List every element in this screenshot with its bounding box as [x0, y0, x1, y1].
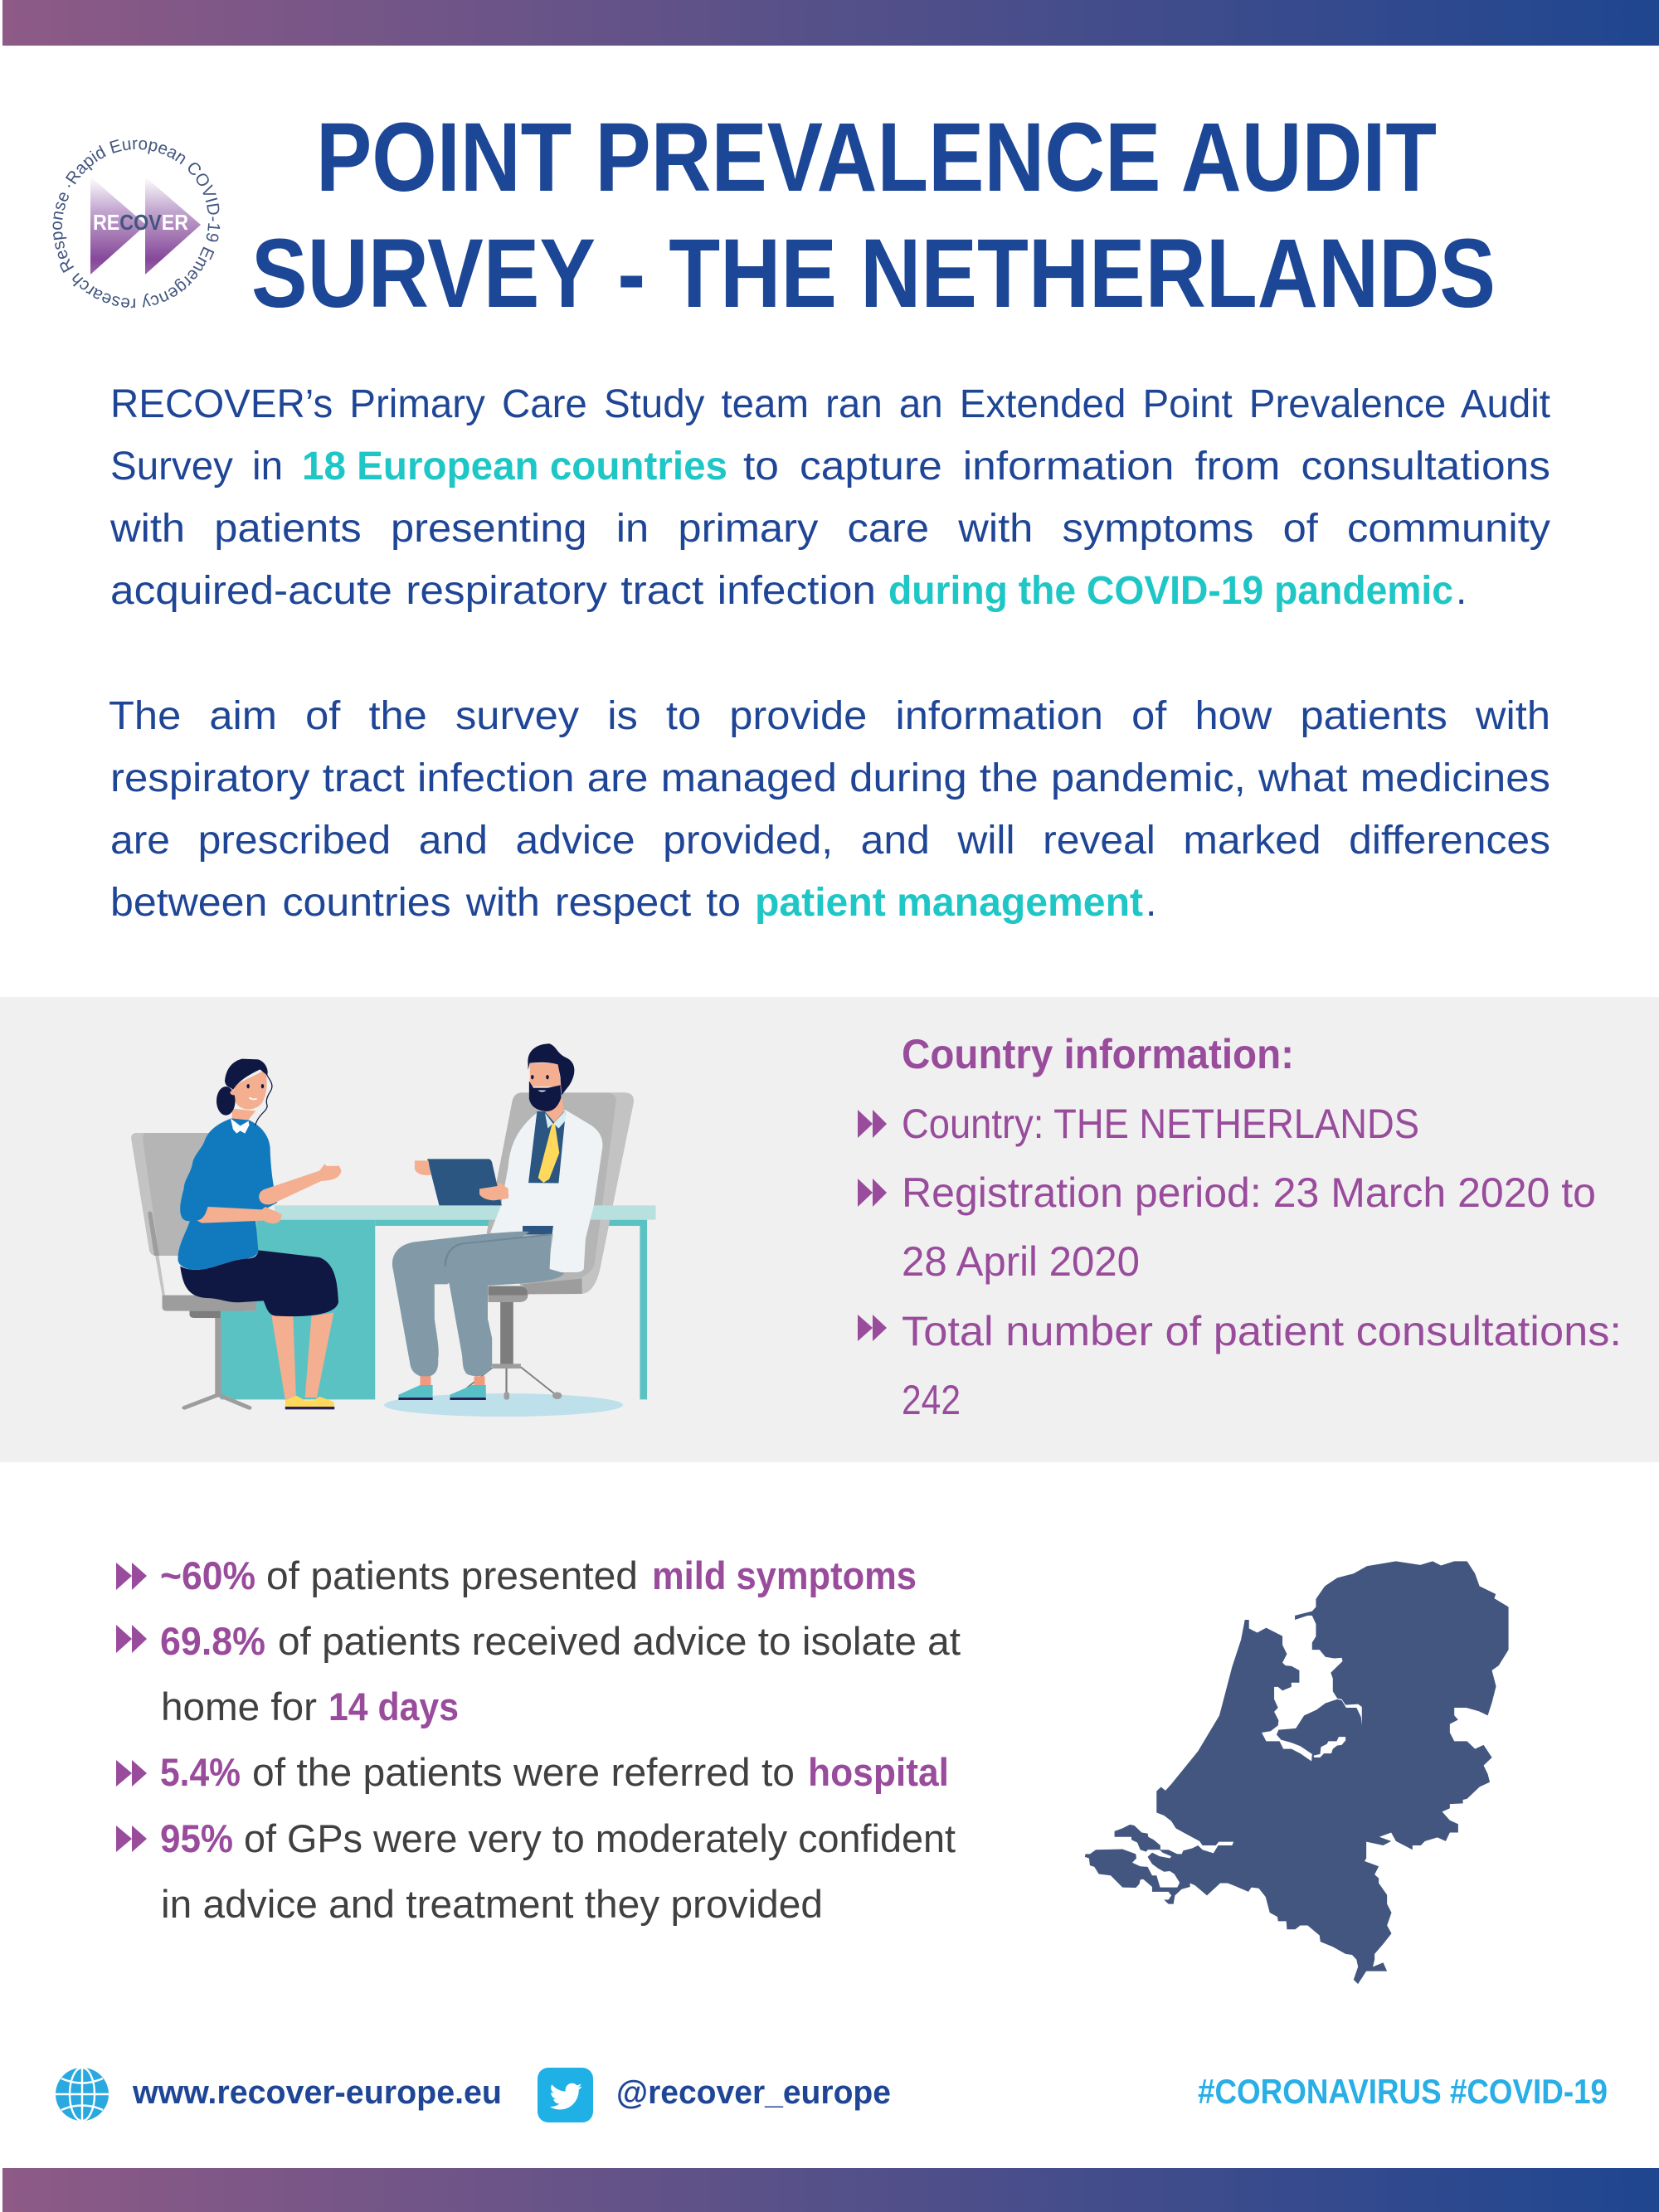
- intro paragraph 1: during the COVID-19 pandemic: [888, 569, 1453, 613]
- key findings list: 14 days: [328, 1685, 459, 1728]
- logo wordmark: RECOVER: [93, 210, 188, 235]
- key findings list: of GPs were very to moderately confident: [244, 1816, 956, 1860]
- intro paragraph 2: The aim of the survey is to provide information of how patients with: [109, 694, 1550, 738]
- intro paragraph 1: Survey in: [110, 445, 283, 489]
- icon: globe: [56, 2068, 109, 2121]
- intro paragraph 2: patient management: [755, 881, 1143, 925]
- title: SURVEY - THE NETHERLANDS: [251, 219, 1496, 328]
- key findings list: hospital: [808, 1750, 949, 1794]
- country information text: 28 April 2020: [902, 1238, 1140, 1285]
- intro paragraph 1: acquired-acute respiratory tract infection: [110, 569, 876, 613]
- country information text: Country information:: [902, 1031, 1294, 1077]
- key findings list: ~60%: [160, 1553, 255, 1597]
- key findings list: of patients presented: [266, 1553, 638, 1597]
- footer: hashtags: #CORONAVIRUS #COVID-19: [1198, 2072, 1608, 2111]
- footer: twitter: [538, 2068, 891, 2122]
- key findings list: of the patients were referred to: [252, 1750, 795, 1794]
- footer: twitter: @recover_europe: [616, 2074, 891, 2111]
- doctor chair: [467, 1092, 634, 1400]
- country information text: [858, 1031, 1622, 1423]
- intro paragraph 1: [109, 382, 1550, 613]
- bullet arrow: [116, 1625, 147, 1653]
- logo: RECOVER: [53, 139, 221, 309]
- key findings list: mild symptoms: [652, 1553, 917, 1597]
- title: POINT PREVALENCE AUDIT: [316, 103, 1437, 212]
- intro paragraph 2: respiratory tract infection are managed during the pandemic, what medicines: [110, 756, 1550, 800]
- desk: [221, 1220, 647, 1399]
- key findings list: [116, 1553, 961, 1926]
- key findings list: of patients received advice to isolate at: [278, 1619, 961, 1663]
- top gradient bar: [2, 0, 1659, 46]
- grey panel: country information: [0, 997, 1659, 1462]
- intro paragraph 2: between countries with respect to: [110, 881, 741, 925]
- country information text: Total number of patient consultations:: [902, 1308, 1622, 1354]
- country information text: Country: THE NETHERLANDS: [902, 1101, 1419, 1147]
- intro paragraph 1: with patients presenting in primary care with symptoms of community: [109, 507, 1550, 551]
- map of the Netherlands: [1085, 1561, 1509, 1984]
- bottom gradient bar: [2, 2168, 1659, 2212]
- woman figure: [178, 1059, 341, 1409]
- bullet arrow: [858, 1315, 887, 1341]
- key findings list: in advice and treatment they provided: [161, 1882, 823, 1926]
- desk top: [275, 1205, 656, 1220]
- doctor figure: [392, 1043, 602, 1400]
- intro paragraph 2: [109, 694, 1550, 925]
- intro paragraph 2: are prescribed and advice provided, and will reveal marked differences: [110, 819, 1550, 863]
- woman chair: [131, 1133, 270, 1318]
- woman chair base: [184, 1318, 249, 1407]
- icon: twitter: [538, 2068, 593, 2122]
- footer: website: [56, 2068, 502, 2121]
- intro paragraph 1: .: [1456, 569, 1467, 613]
- key findings list: 69.8%: [160, 1619, 265, 1663]
- bullet arrow: [116, 1826, 147, 1852]
- country information text: 242: [902, 1377, 961, 1423]
- bullet arrow: [858, 1110, 887, 1138]
- intro paragraph 1: to capture information from consultations: [743, 445, 1550, 489]
- footer: website: www.recover-europe.eu: [132, 2074, 502, 2111]
- key findings list: home for: [161, 1685, 317, 1728]
- bullet arrow: [116, 1563, 147, 1590]
- logo play triangles: [90, 177, 201, 275]
- intro paragraph 1: RECOVER’s Primary Care Study team ran an Extended Point Prevalence Audit: [110, 382, 1550, 426]
- key findings list: 95%: [160, 1816, 233, 1860]
- intro paragraph 1: 18 European countries: [302, 445, 727, 489]
- logo circular text: ·Rapid European COVID-19 Emergency research Response: [53, 139, 221, 309]
- bullet arrow: [116, 1760, 147, 1787]
- intro paragraph 2: .: [1146, 881, 1156, 925]
- illustration: patient and doctor at desk: [131, 1043, 655, 1417]
- bullet arrow: [858, 1179, 887, 1207]
- floor shadow: [384, 1393, 623, 1417]
- key findings list: 5.4%: [160, 1750, 241, 1794]
- title: [251, 103, 1496, 328]
- country information text: Registration period: 23 March 2020 to: [902, 1169, 1596, 1216]
